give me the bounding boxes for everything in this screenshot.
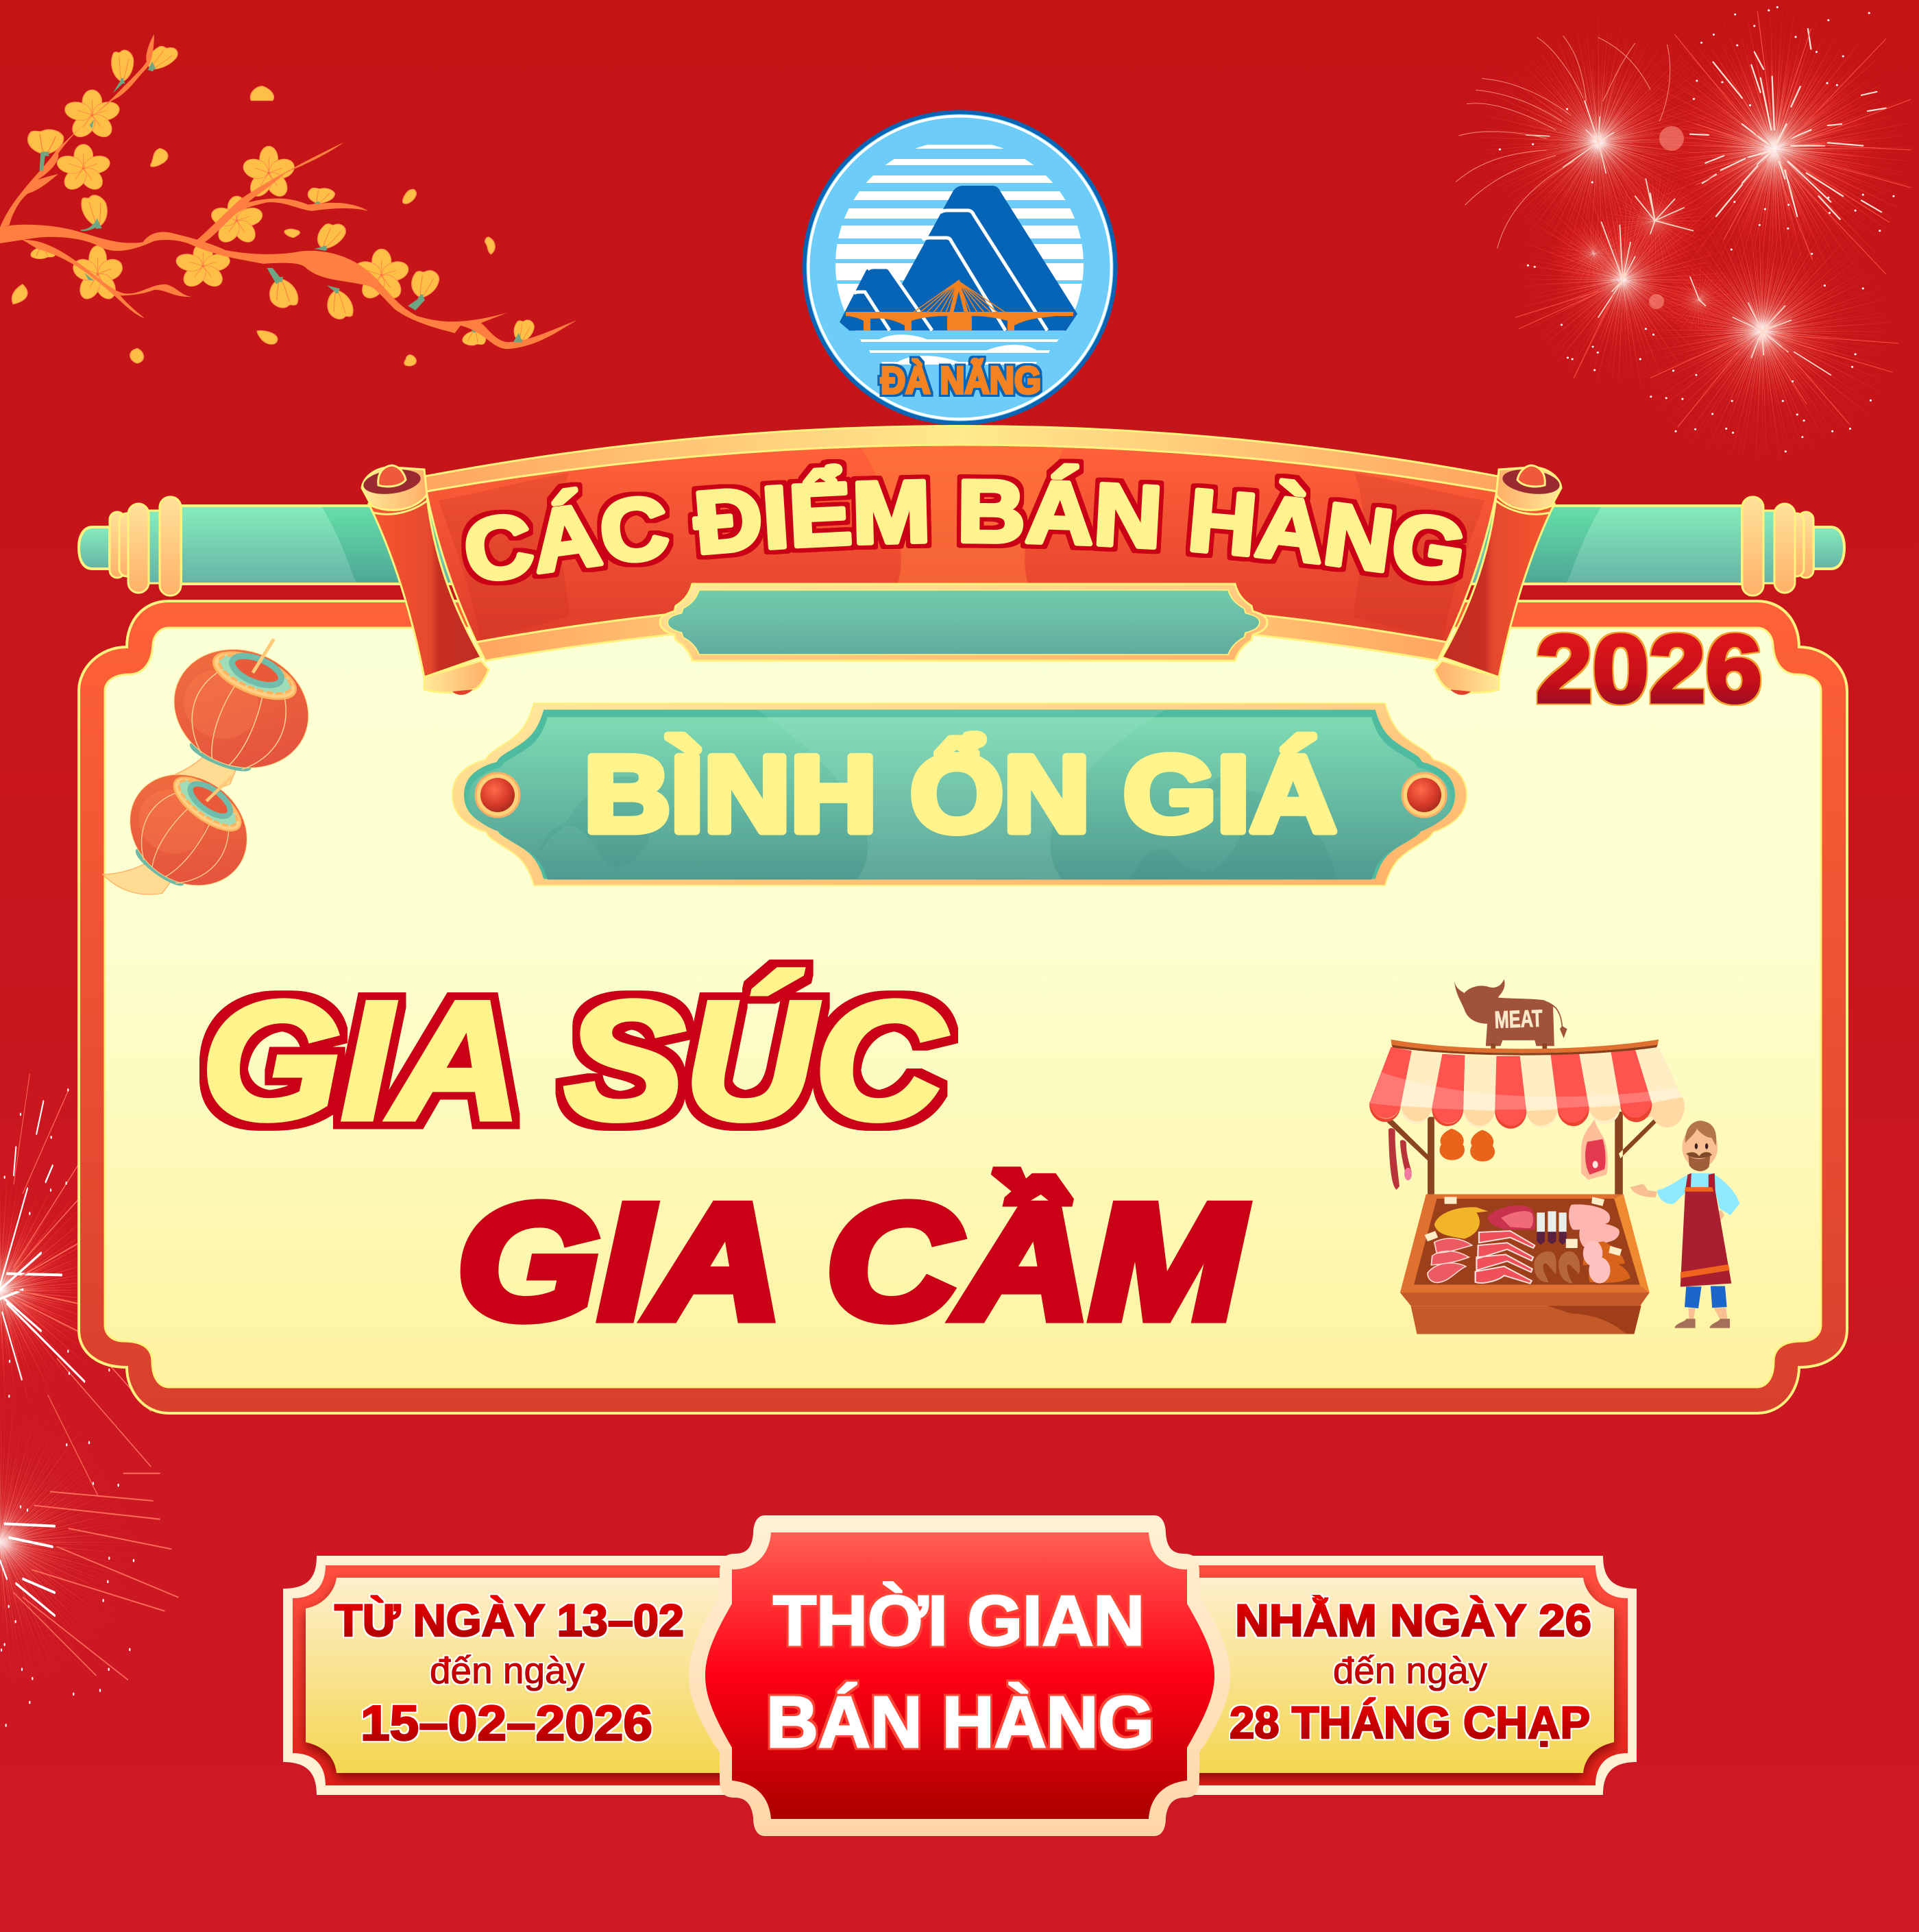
banner red cloth bbox=[426, 445, 1497, 642]
date left block bbox=[334, 1595, 684, 1751]
connector: đến ngày bbox=[1333, 1650, 1487, 1691]
banner top trim bbox=[425, 426, 1498, 491]
badge line 2: BÁN HÀNG bbox=[766, 1682, 1154, 1763]
lantern lower bbox=[87, 738, 279, 937]
flowers and buds bbox=[28, 44, 536, 345]
right rod end bbox=[1742, 497, 1844, 596]
clouds bbox=[860, 334, 1059, 365]
lunar end: 28 THÁNG CHẠP bbox=[1230, 1697, 1590, 1748]
connector: đến ngày bbox=[430, 1650, 585, 1691]
bull sign bbox=[1454, 979, 1567, 1046]
centre badge bbox=[689, 1515, 1230, 1836]
panel frame bbox=[79, 601, 1847, 1413]
branch limbs bbox=[0, 34, 577, 349]
main panel bbox=[79, 601, 1847, 1413]
meat stall illustration bbox=[1369, 979, 1739, 1334]
banner heading: CÁC ĐIỂM BÁN HÀNG bbox=[461, 459, 1467, 585]
logo Đà Nẵng bbox=[805, 112, 1116, 424]
plaque heading: BÌNH ỔN GIÁ bbox=[584, 734, 1336, 855]
sign label: MEAT bbox=[1494, 1005, 1543, 1034]
banner lower trim bbox=[476, 598, 1447, 661]
right scroll roll bbox=[1434, 465, 1561, 695]
cloud motifs bbox=[613, 777, 1258, 798]
scroll rod bbox=[79, 497, 1844, 596]
counter bbox=[1400, 1195, 1650, 1334]
plaque: bình ổn giá bbox=[452, 703, 1467, 885]
stall posts bbox=[1386, 1043, 1665, 1195]
butcher bbox=[1630, 1121, 1739, 1328]
small teal plaque bbox=[660, 584, 1267, 661]
mountains bbox=[840, 186, 1077, 331]
year 2026: 2026 bbox=[1536, 615, 1762, 722]
hanging meats bbox=[1389, 1119, 1608, 1190]
lunar start: NHẰM NGÀY 26 bbox=[1235, 1595, 1591, 1646]
logo wordmark: ĐÀ NẴNG bbox=[881, 358, 1041, 402]
heading: gia súc: GIA SÚC bbox=[201, 966, 946, 1154]
left scroll roll bbox=[362, 465, 489, 695]
start date: TỪ NGÀY 13–02 bbox=[334, 1595, 684, 1646]
heading: gia cầm: GIA CẦM bbox=[457, 1171, 1246, 1353]
panel paper bbox=[105, 628, 1821, 1387]
title banner bbox=[360, 425, 1563, 695]
loose petals bbox=[12, 86, 495, 366]
green sepals bbox=[40, 62, 522, 342]
fireworks left bbox=[0, 1074, 178, 1725]
date right block bbox=[1230, 1595, 1591, 1748]
striped sun bbox=[822, 145, 1097, 331]
rivets bbox=[476, 773, 1446, 817]
bridge bbox=[846, 280, 1073, 330]
lantern upper bbox=[141, 612, 334, 824]
left rod end bbox=[79, 497, 181, 596]
fireworks top right bbox=[1456, 8, 1910, 452]
badge line 1: THỜI GIAN bbox=[773, 1581, 1145, 1660]
end date: 15–02–2026 bbox=[360, 1696, 652, 1751]
meats on counter bbox=[1425, 1197, 1630, 1284]
apricot blossom branch bbox=[0, 34, 577, 366]
date ribbon bbox=[283, 1556, 1637, 1795]
awning bbox=[1369, 1040, 1685, 1129]
